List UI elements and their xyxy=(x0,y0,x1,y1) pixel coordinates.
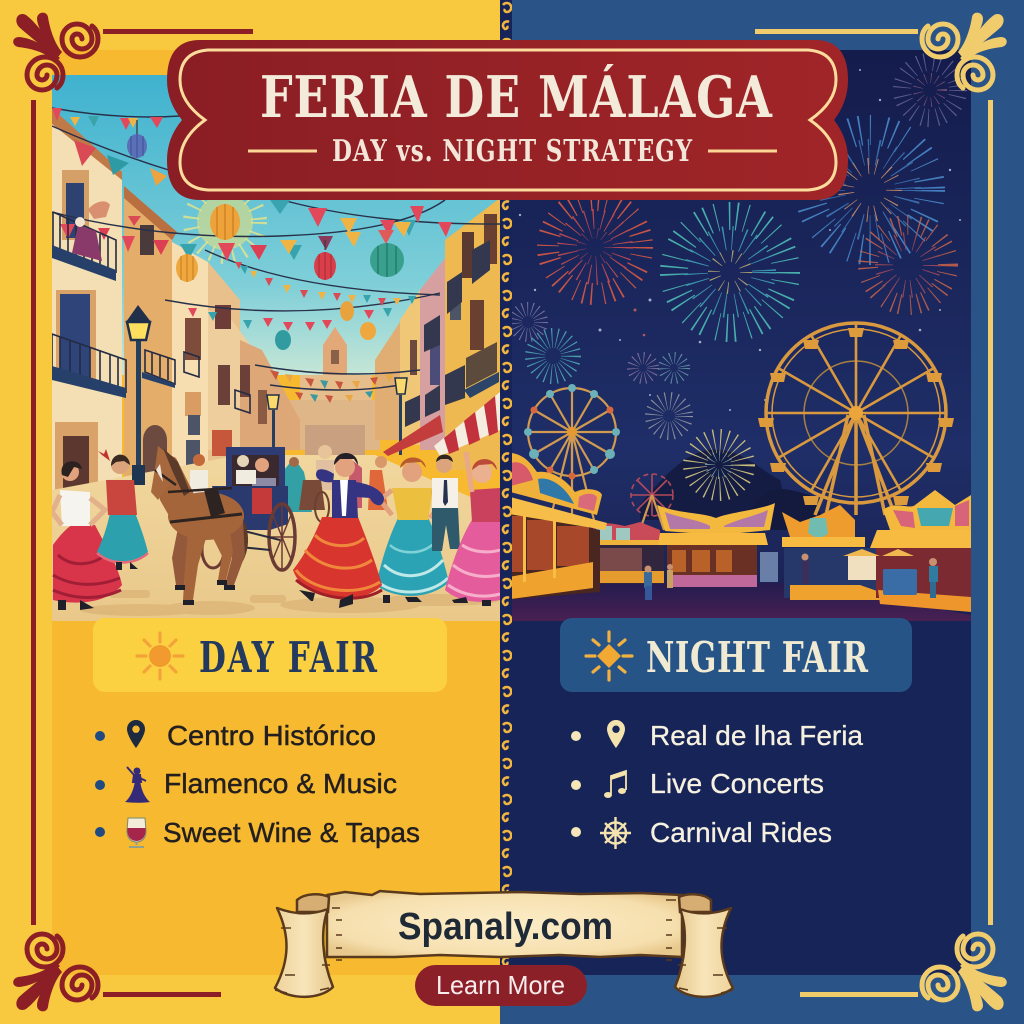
icon: map pin xyxy=(607,720,625,748)
small ferris wheel xyxy=(524,384,620,520)
dancer: red left xyxy=(52,461,122,610)
sun xyxy=(191,188,259,256)
scroll left roll xyxy=(275,894,342,997)
heading: night fair: NIGHT FAIR xyxy=(646,632,869,682)
border lines: night xyxy=(755,29,993,997)
street ground xyxy=(52,455,500,622)
firework: red xyxy=(548,200,642,294)
panel: day fair label xyxy=(93,618,447,692)
firework: red orange right xyxy=(868,225,948,305)
panel: day inner xyxy=(52,50,501,975)
far church and buildings xyxy=(290,327,380,455)
corner ornament: top left xyxy=(13,13,98,90)
icon: sun xyxy=(137,633,183,679)
scroll banner xyxy=(275,891,733,997)
firework: faint purple xyxy=(902,62,958,118)
title text: FERIA DE MÁLAGA xyxy=(260,63,773,131)
distant treeline xyxy=(640,450,790,520)
item: Flamenco & Music: Flamenco & Music xyxy=(164,768,397,799)
subtitle rule left xyxy=(248,150,317,152)
bullets xyxy=(95,731,105,837)
icon: carnival wheel xyxy=(600,817,631,849)
title banner xyxy=(167,40,848,200)
right balconies xyxy=(466,342,497,388)
lamp post xyxy=(126,305,151,485)
corner ornament: bottom right xyxy=(922,934,1007,1011)
man in white shirt xyxy=(432,454,460,551)
carriage xyxy=(190,447,295,570)
bullets xyxy=(571,731,581,837)
scroll text: Spanaly.com xyxy=(398,906,613,948)
bottom band left xyxy=(0,975,500,1024)
background: day side xyxy=(0,0,502,1024)
scroll main ribbon xyxy=(327,891,682,957)
balconies left xyxy=(52,212,250,413)
stall: far left xyxy=(503,453,607,600)
dancer: red center xyxy=(293,453,384,608)
stars xyxy=(519,69,961,421)
day scene illustration xyxy=(52,75,501,622)
item: Real de lha Feria: Real de lha Feria xyxy=(650,720,863,751)
divider: ornamental curl strip xyxy=(500,0,512,975)
icon: wine glass xyxy=(127,818,146,847)
item: Live Concerts: Live Concerts xyxy=(650,768,824,799)
icon: map pin xyxy=(127,720,145,748)
icon: flamenco dancer xyxy=(125,767,150,803)
night scene illustration xyxy=(502,50,971,622)
bottom band right xyxy=(500,975,1024,1024)
subtitle rule right xyxy=(708,150,777,152)
fair visitors xyxy=(644,554,938,600)
border lines: day xyxy=(31,29,253,997)
panel: night fair label xyxy=(560,618,912,692)
horse xyxy=(151,446,248,605)
right buildings xyxy=(375,198,500,470)
list: night fair items xyxy=(571,720,863,849)
button: learn more xyxy=(415,965,587,1006)
other lamps xyxy=(267,378,407,455)
tiny ferris wheel xyxy=(631,474,673,530)
background: night side xyxy=(502,0,1024,1024)
corner ornament: bottom left xyxy=(13,934,98,1011)
string lights bunting xyxy=(52,108,500,390)
item: Centro Histórico: Centro Histórico xyxy=(167,720,376,751)
dancer: pink skirt xyxy=(445,452,500,606)
dancer: teal skirt with red top xyxy=(97,449,148,570)
list: day fair items xyxy=(95,720,420,848)
far crowd xyxy=(282,445,388,522)
stall: second xyxy=(592,522,664,584)
icon: night sun xyxy=(586,632,632,680)
stall: right two xyxy=(870,490,971,612)
left buildings xyxy=(52,108,300,500)
big ferris wheel xyxy=(758,323,954,515)
scroll right roll xyxy=(666,894,733,997)
food carts xyxy=(843,549,917,595)
firework: blue xyxy=(810,130,930,250)
item: Sweet Wine & Tapas: Sweet Wine & Tapas xyxy=(163,817,420,848)
button: learn more: Learn More xyxy=(436,970,565,1000)
stall: right one xyxy=(782,505,880,600)
item: Carnival Rides: Carnival Rides xyxy=(650,817,832,848)
icon: music notes xyxy=(604,771,626,798)
small fireworks xyxy=(515,309,743,489)
firework: teal xyxy=(674,216,786,328)
balcony figure xyxy=(72,201,110,261)
ground xyxy=(502,583,971,622)
panel: night inner xyxy=(502,50,971,975)
dancer: teal skirt xyxy=(376,458,449,603)
lanterns xyxy=(127,120,404,350)
stall: center xyxy=(657,503,778,587)
corner ornament: top right xyxy=(922,13,1007,90)
subtitle text: DAY vs. NIGHT STRATEGY xyxy=(332,134,693,169)
awnings xyxy=(383,392,500,456)
heading: day fair: DAY FAIR xyxy=(199,632,378,682)
